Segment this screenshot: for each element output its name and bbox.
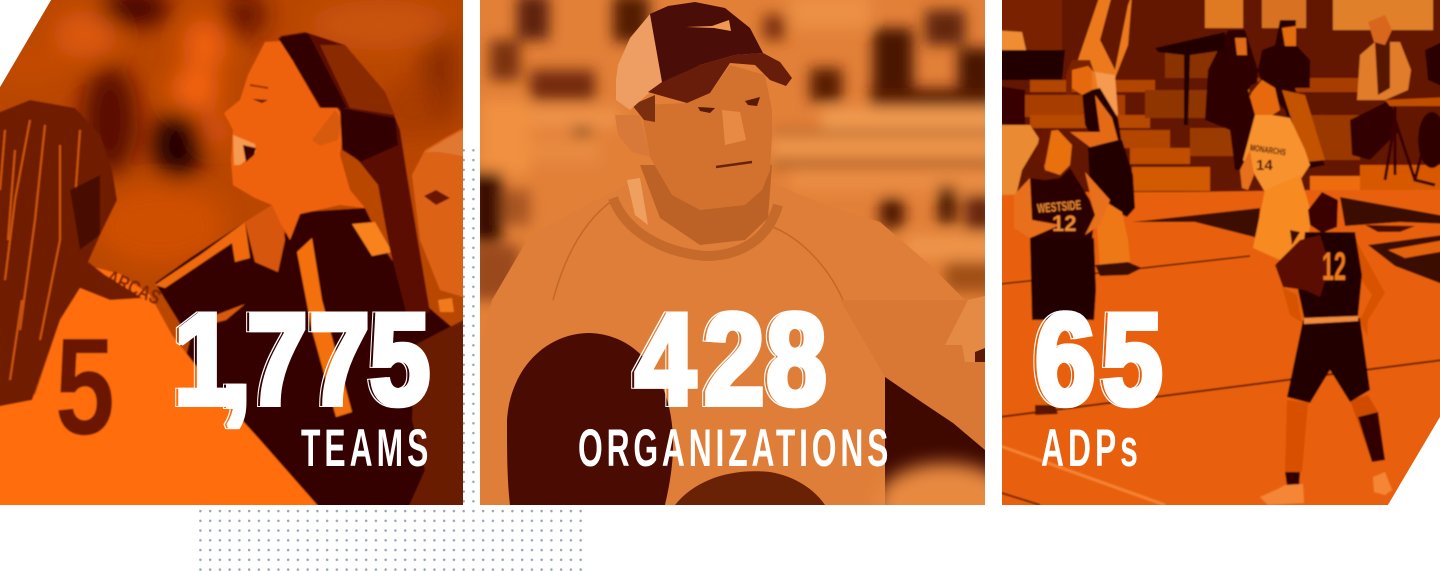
number: 428: 428 (635, 287, 827, 432)
panel: organizations photo (480, 0, 985, 505)
stat: 428 organizations (578, 287, 892, 478)
player in Monarchs jersey: MONARCHS (1249, 143, 1287, 157)
stat: 65 ADPs (1035, 287, 1163, 478)
main girl jersey (155, 200, 473, 515)
corner cut: top left (0, 0, 51, 87)
number: 1,775: 775 (247, 287, 430, 432)
left girl jersey: 5 (55, 310, 115, 464)
label: teams: TEAMS (301, 419, 432, 478)
player seen from behind: 12 (1322, 245, 1346, 289)
dot pattern (199, 149, 584, 571)
left girl hair (0, 100, 142, 408)
number: 1,775: , (221, 289, 251, 434)
main girl face (224, 40, 365, 240)
player seen from behind (1260, 192, 1392, 505)
label: ADPs: ADPs (1041, 419, 1142, 478)
foreground heads (507, 333, 825, 505)
left girl jersey (0, 263, 326, 515)
lower right shadow (882, 377, 985, 505)
left girl jersey: ARCAS (103, 266, 164, 309)
player in Monarchs jersey: 14 (1256, 157, 1273, 174)
man neck and face (615, 65, 772, 245)
player in dark jersey (1066, 60, 1142, 276)
bleachers (992, 0, 1440, 196)
corner cut: bottom right (1388, 417, 1440, 505)
drum kit and music stand (1155, 32, 1440, 185)
spectators (992, 15, 1440, 200)
number: 1,775: 1 (174, 287, 235, 432)
right girl face (412, 128, 463, 298)
label: organizations: ORGANIZATIONS (578, 419, 892, 478)
panel: teams photo (0, 0, 473, 515)
player in Westside jersey (1014, 128, 1110, 415)
court floor markings (992, 190, 1440, 515)
stat: 1,775 teams (174, 287, 432, 478)
number: 65: 65 (1035, 287, 1163, 432)
defender with raised arms (1078, 0, 1132, 130)
man cap (616, 2, 792, 110)
player in Westside jersey: WESTSIDE (1037, 197, 1082, 216)
man sweater (490, 196, 985, 450)
mouth and eye (233, 85, 342, 165)
player in Monarchs jersey (1240, 80, 1312, 260)
panel: ADPs photo (992, 0, 1440, 515)
player in Westside jersey: 12 (1052, 211, 1076, 236)
main girl hair (278, 32, 430, 320)
